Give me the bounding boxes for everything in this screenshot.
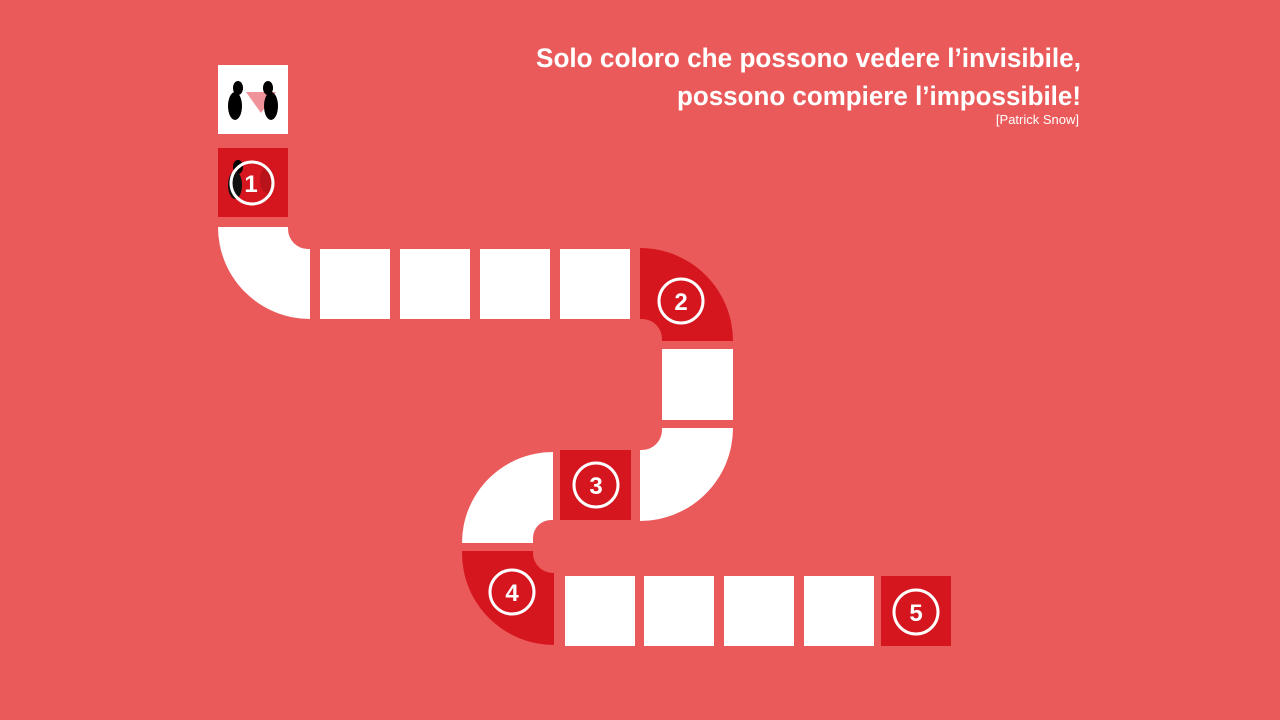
step 2: 2	[674, 289, 688, 316]
step 4	[462, 551, 554, 645]
path curve 1	[218, 227, 310, 319]
icon: footprints start tile	[218, 65, 288, 134]
step 5: 5	[909, 600, 923, 627]
step 3: 3	[589, 473, 603, 500]
step 1: 1	[244, 171, 258, 198]
step 3	[560, 450, 631, 520]
step 4: 4	[505, 580, 519, 607]
quote title: [Patrick Snow]	[996, 112, 1079, 127]
step 5	[881, 576, 951, 646]
path squares row 2	[565, 576, 874, 646]
quote title	[536, 43, 1081, 127]
path curve 4	[462, 452, 553, 543]
step 2	[640, 248, 733, 341]
quote title: possono compiere l’impossibile!	[677, 81, 1081, 111]
quote title: Solo coloro che possono vedere l’invisibile,	[536, 43, 1081, 73]
step 1	[218, 148, 288, 217]
path curve 3	[640, 428, 733, 521]
path square	[662, 349, 733, 420]
path squares row 1	[320, 249, 630, 319]
